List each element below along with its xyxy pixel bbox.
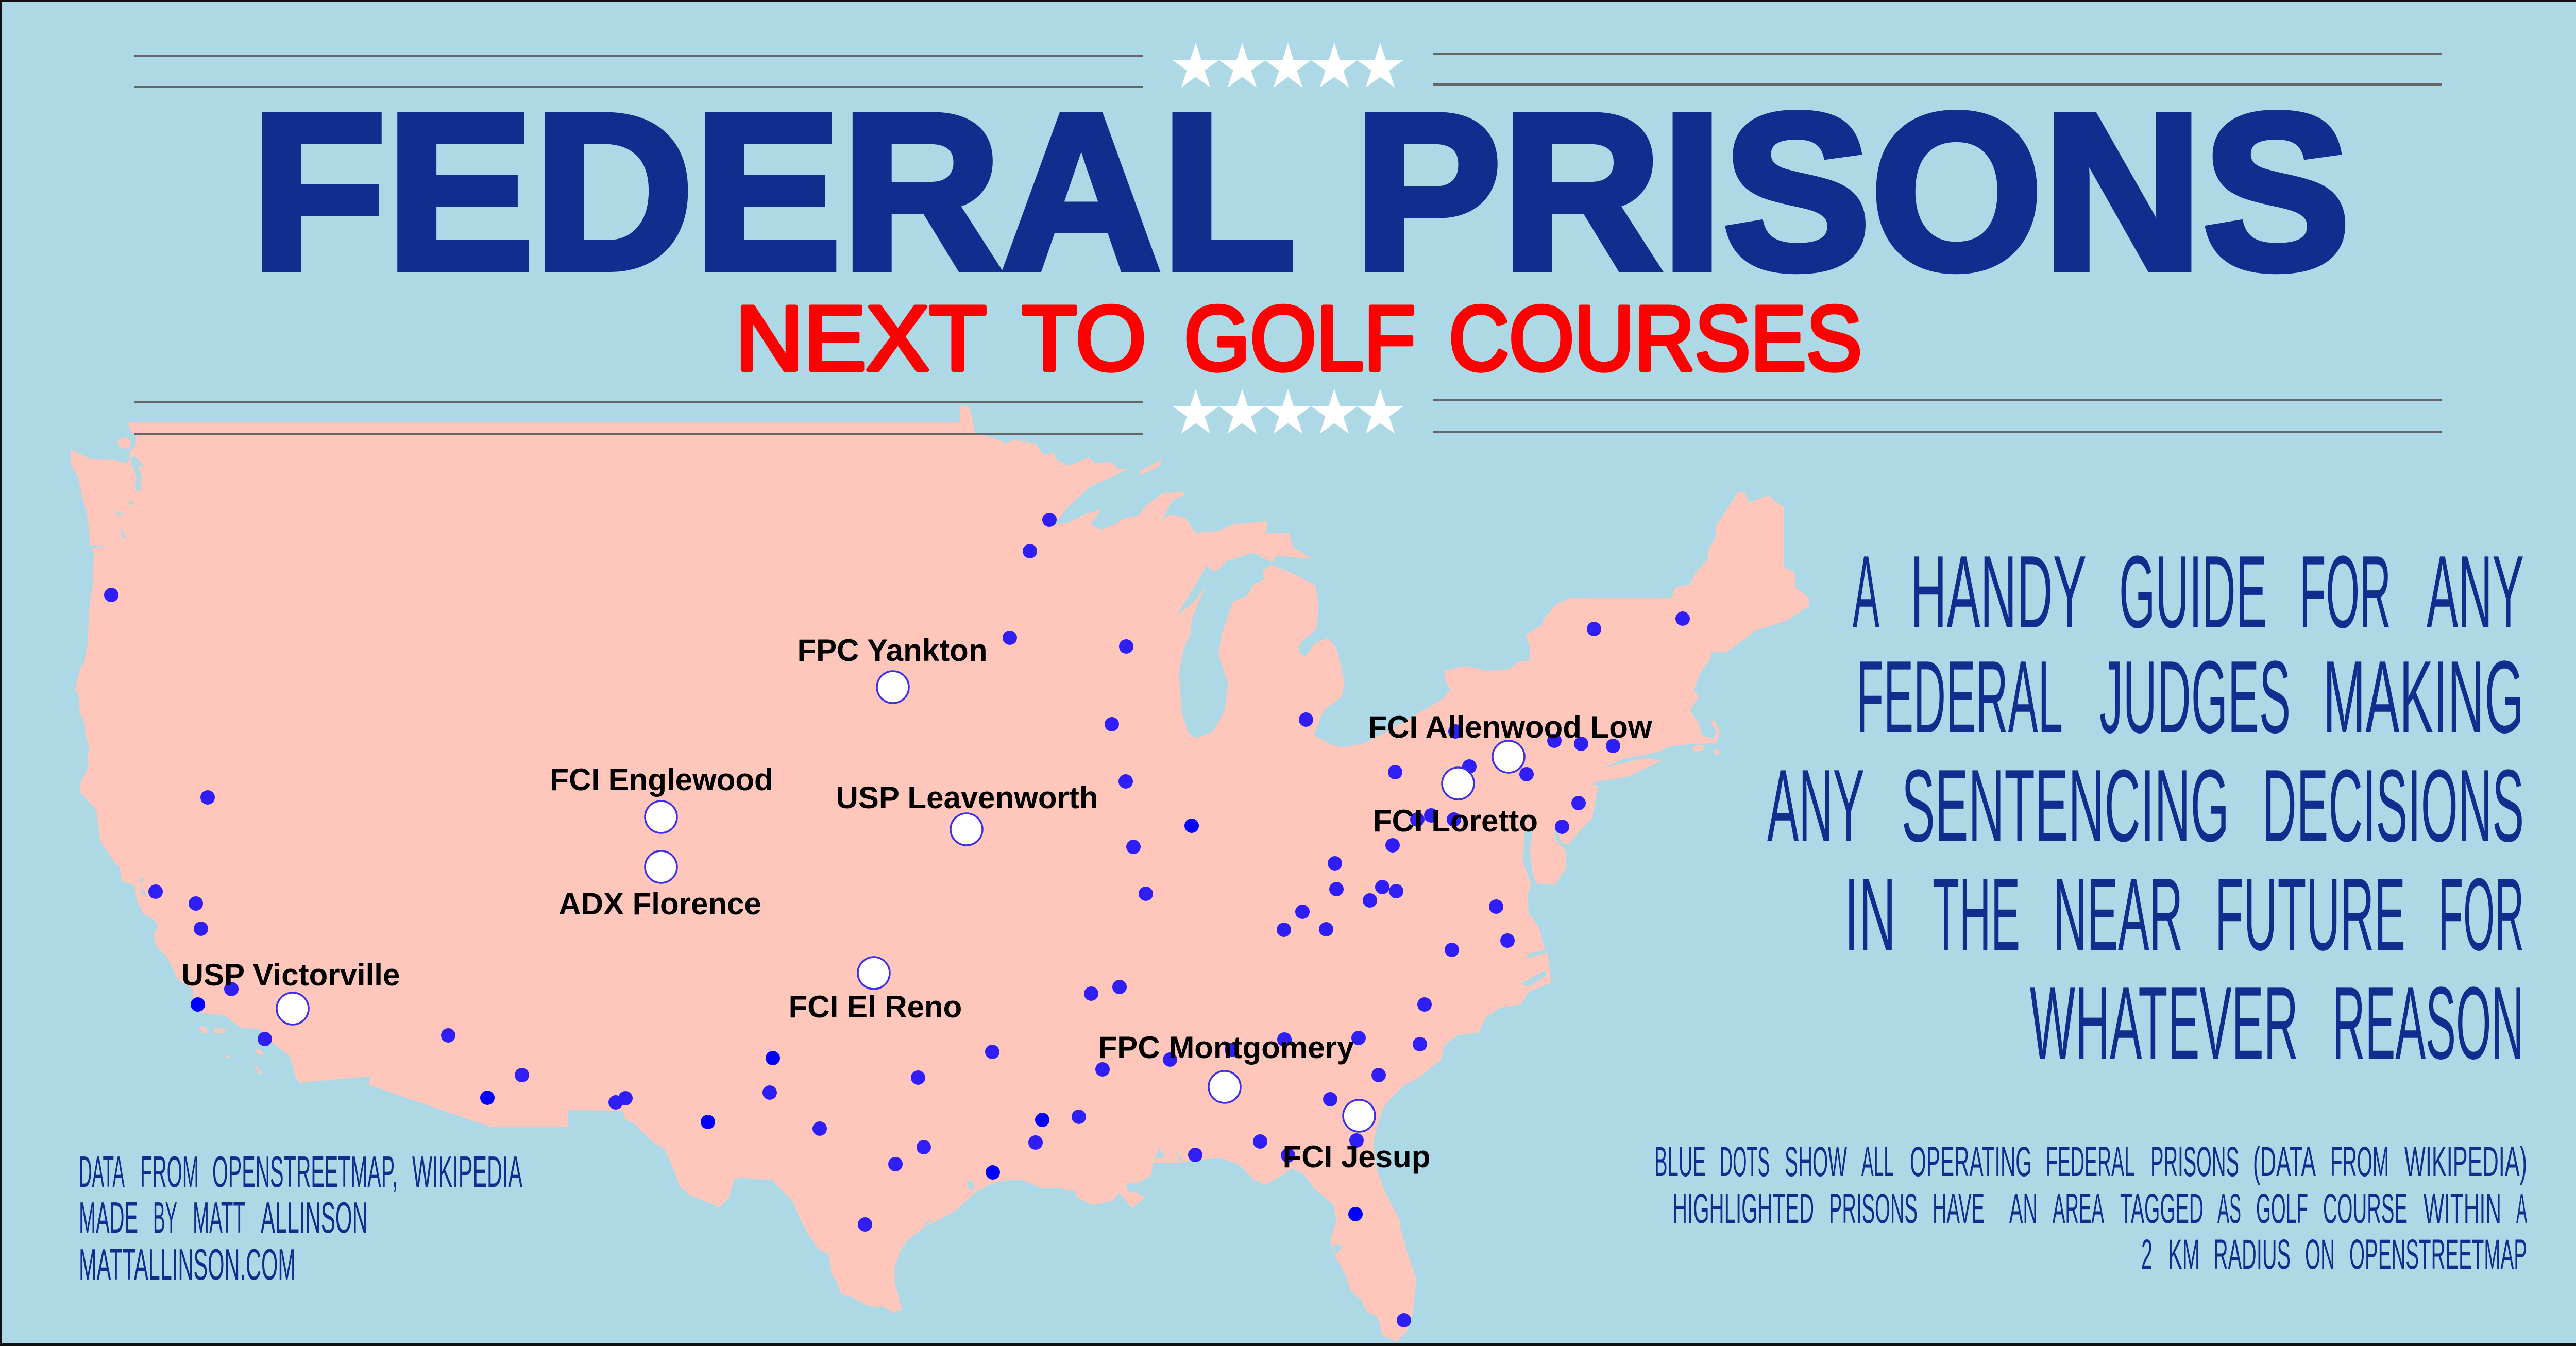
highlighted prison: USP Victorville: USP Victorville: [181, 958, 400, 992]
legend note: OPERATING: [1910, 1138, 2032, 1185]
legend note: PRISONS: [1829, 1185, 1918, 1232]
highlighted prison: ADX Florence: ADX Florence: [558, 887, 761, 921]
highlighted prison: FCI Allenwood Low: [1368, 710, 1652, 773]
legend note: 2: [2141, 1231, 2153, 1278]
subtitle: [735, 287, 1862, 389]
main guide statement: NEAR: [2053, 857, 2183, 972]
legend note: DOTS: [1720, 1138, 1770, 1185]
subtitle: COURSES: [1449, 287, 1862, 389]
legend note: FEDERAL: [2046, 1138, 2135, 1185]
main guide statement: JUDGES: [2099, 640, 2291, 755]
credits: DATA: [79, 1148, 125, 1197]
highlighted prison: FPC Montgomery: FPC Montgomery: [1098, 1030, 1354, 1065]
legend note: RADIUS: [2213, 1231, 2291, 1278]
legend note: AN: [2009, 1185, 2038, 1232]
highlighted prison: FPC Yankton: FPC Yankton: [798, 633, 987, 668]
credits: OPENSTREETMAP,: [212, 1148, 398, 1197]
main guide statement: [1767, 535, 2524, 1081]
text: A: [2516, 1185, 2527, 1232]
legend note: WITHIN: [2424, 1185, 2501, 1232]
highlighted prison: USP Victorville: [181, 958, 400, 1025]
credits: FROM: [140, 1148, 199, 1197]
legend note: HAVE: [1933, 1185, 1985, 1232]
highlighted prison: FCI Englewood: FCI Englewood: [550, 762, 773, 797]
highlighted prison: USP Leavenworth: USP Leavenworth: [836, 780, 1098, 815]
highlighted prison: FCI Jesup: FCI Jesup: [1283, 1139, 1430, 1174]
subtitle: TO: [1022, 287, 1146, 389]
legend note: AS: [2217, 1185, 2241, 1232]
blue dots: all operating federal prisons: [104, 513, 1690, 1327]
highlighted prison: FCI Englewood: [550, 762, 773, 833]
legend note: TAGGED: [2120, 1185, 2204, 1232]
highlighted prison: FCI Allenwood Low: FCI Allenwood Low: [1368, 710, 1652, 744]
highlighted prison: ADX Florence: [558, 851, 761, 921]
main guide statement: IN: [1844, 857, 1896, 972]
legend note: [1654, 1138, 2527, 1278]
highlighted prison: FCI El Reno: [789, 957, 962, 1024]
main guide statement: ANY: [1767, 748, 1865, 863]
main guide statement: GUIDE: [2119, 535, 2267, 650]
legend note: GOLF: [2256, 1185, 2308, 1232]
rules and stars above the title: [134, 43, 2442, 88]
title: FEDERAL PRISONS: [251, 68, 2350, 316]
legend note: ALL: [1861, 1138, 1894, 1185]
rules and stars below the subtitle: [134, 389, 2442, 435]
highlighted prison: FPC Yankton: [798, 633, 987, 703]
highlighted prison: FPC Montgomery: [1098, 1030, 1354, 1103]
legend note: (DATA: [2253, 1138, 2316, 1185]
credits: ALLINSON: [261, 1194, 368, 1242]
legend note: KM: [2168, 1231, 2200, 1278]
map of the contiguous United States: [71, 406, 1809, 1342]
credits: MATTALLINSON.COM: [79, 1240, 296, 1289]
credits: BY: [153, 1194, 177, 1242]
main guide statement: A: [1853, 535, 1879, 650]
legend note: AREA: [2053, 1185, 2104, 1232]
legend note: COURSE: [2323, 1185, 2408, 1232]
subtitle: NEXT: [735, 287, 987, 389]
highlighted prison: FCI Jesup: [1283, 1100, 1430, 1174]
credits: MATT: [193, 1194, 245, 1242]
credits: [79, 1148, 522, 1289]
subtitle: GOLF: [1184, 287, 1416, 389]
highlighted prison: FCI El Reno: FCI El Reno: [789, 990, 962, 1024]
main guide statement: FEDERAL: [1856, 640, 2063, 755]
main guide statement: SENTENCING: [1902, 748, 2229, 863]
legend note: PRISONS: [2150, 1138, 2239, 1185]
highlighted prison: FCI Loretto: [1373, 768, 1538, 838]
highlighted prison: USP Leavenworth: [836, 780, 1098, 845]
main guide statement: THE: [1933, 857, 2020, 972]
legend note: HIGHLIGHTED: [1672, 1185, 1814, 1232]
legend note: ON: [2305, 1231, 2335, 1278]
legend note: BLUE: [1654, 1138, 1706, 1185]
main guide statement: HANDY: [1910, 535, 2087, 650]
text: WIKIPEDIA: [412, 1148, 522, 1197]
legend note: SHOW: [1785, 1138, 1847, 1185]
main guide statement: FOR: [2299, 535, 2391, 650]
highlighted prison: FCI Loretto: FCI Loretto: [1373, 804, 1538, 838]
credits: MADE: [79, 1194, 138, 1242]
legend note: FROM: [2330, 1138, 2389, 1185]
